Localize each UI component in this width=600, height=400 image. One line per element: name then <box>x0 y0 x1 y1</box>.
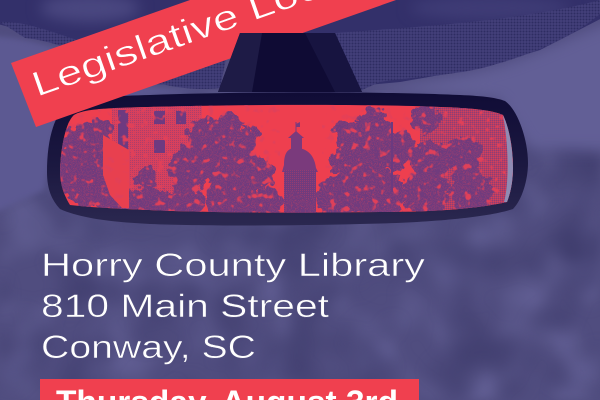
roof highlight right <box>410 0 570 20</box>
mesh fabric band right <box>335 0 600 90</box>
mottled bokeh light <box>0 90 600 400</box>
street address: 810 Main Street <box>41 288 329 324</box>
city and state: Conway, SC <box>41 329 256 365</box>
light visor patch right <box>362 14 600 150</box>
lit building wall <box>103 135 129 208</box>
light visor patch left <box>0 36 218 215</box>
address text <box>41 247 425 365</box>
red foliage speckle <box>60 105 280 213</box>
banner shape <box>11 0 396 127</box>
building at right <box>420 105 515 215</box>
mirror mount <box>218 33 362 92</box>
mottled bokeh shadow <box>0 90 600 400</box>
rearview mirror <box>47 92 528 226</box>
date box <box>40 379 419 400</box>
mirror frame <box>47 92 528 226</box>
mirror glass image <box>60 104 513 213</box>
library name: Horry County Library <box>41 247 425 283</box>
trees <box>60 106 494 213</box>
roof lining, dark top <box>0 0 600 88</box>
glass edge glare <box>503 116 513 202</box>
red banner <box>11 0 441 127</box>
mount highlight right <box>305 33 362 92</box>
mesh fabric band left <box>0 22 230 89</box>
date background <box>40 379 419 400</box>
left building <box>112 105 202 215</box>
capitol dome <box>282 122 318 215</box>
lamp post <box>391 122 393 192</box>
mount highlight <box>218 33 262 92</box>
roof highlight left <box>40 0 140 22</box>
red foliage speckle, right <box>322 105 513 212</box>
